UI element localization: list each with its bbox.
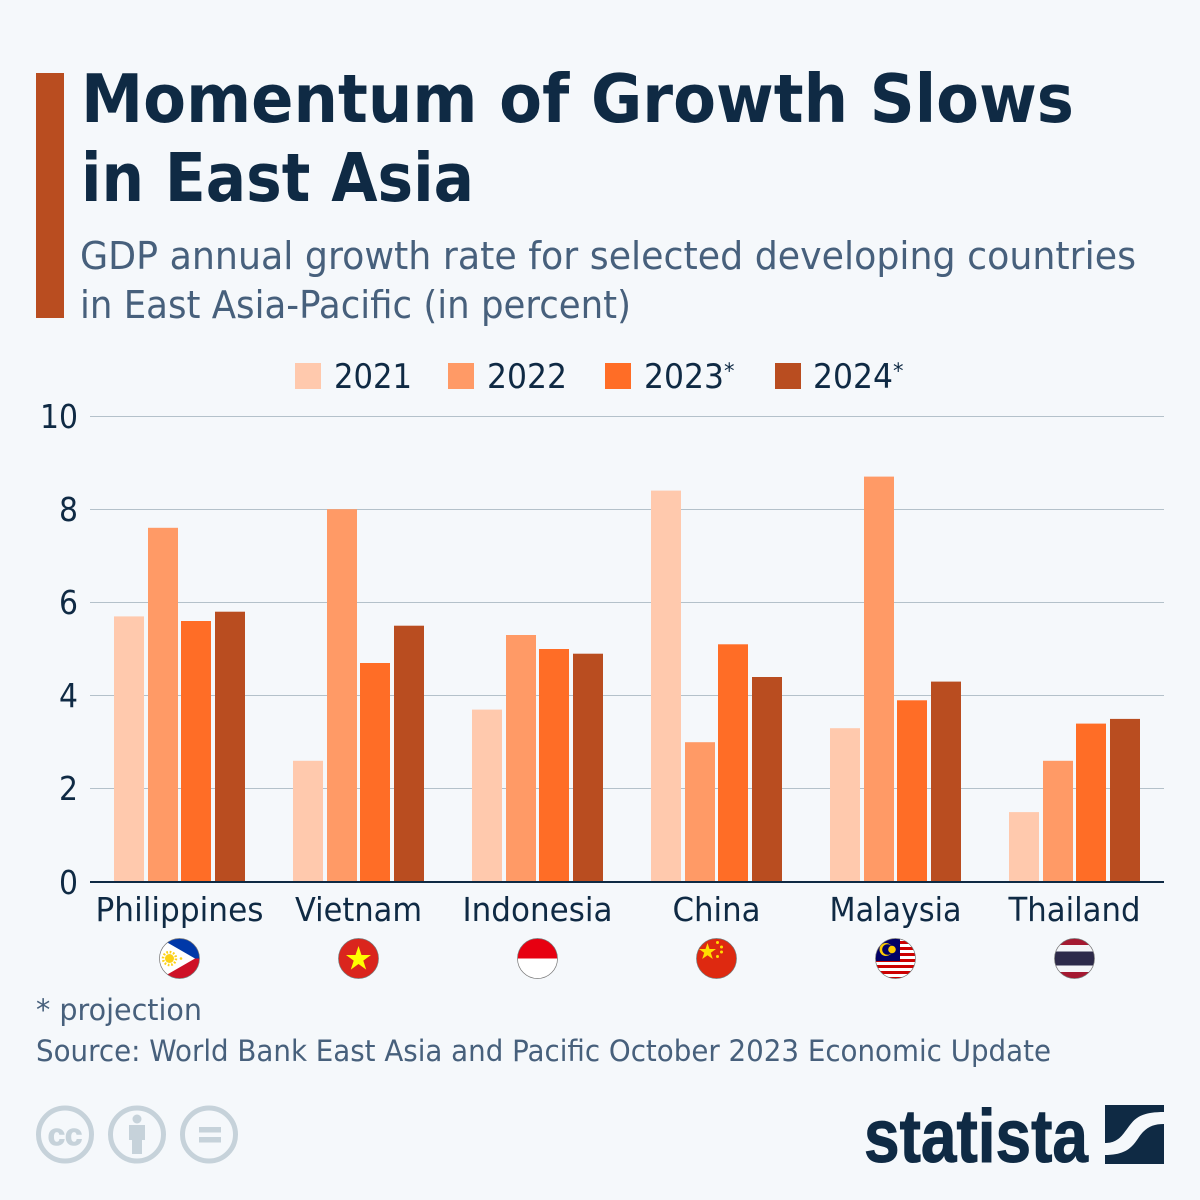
statista logo: statista — [864, 1094, 1089, 1178]
icon: Philippines flag — [159, 938, 200, 979]
y axis labels — [40, 397, 78, 902]
bars: Malaysia — [830, 477, 961, 882]
country labels: China — [672, 890, 760, 929]
country labels: Indonesia — [462, 890, 612, 929]
icon: China flag — [696, 938, 736, 978]
y axis labels: 6 — [59, 583, 78, 622]
footnote: Source: World Bank East Asia and Pacific October 2023 Economic Update — [36, 1034, 1051, 1068]
title: in East Asia — [81, 139, 474, 217]
y axis labels: 8 — [59, 490, 78, 529]
y axis labels: 2 — [59, 769, 78, 808]
country labels: Vietnam — [295, 890, 422, 929]
footnote: * projection — [36, 993, 202, 1027]
icon: no derivatives — [182, 1108, 236, 1161]
gridlines — [90, 416, 1164, 788]
icon: cc license: cc — [48, 1117, 82, 1152]
title — [81, 60, 1074, 217]
bars: China — [651, 491, 782, 882]
legend — [295, 357, 904, 397]
subtitle: in East Asia-Pacific (in percent) — [80, 283, 631, 327]
icon: Vietnam flag — [338, 938, 378, 978]
legend: 2023 — [644, 357, 724, 397]
accent bar — [36, 73, 64, 318]
country labels: Thailand — [1008, 890, 1140, 929]
bars: Indonesia — [472, 635, 603, 882]
bar chart — [114, 477, 1140, 882]
title: Momentum of Growth Slows — [81, 60, 1074, 138]
legend: * — [724, 359, 734, 383]
icon: Malaysia flag — [875, 938, 917, 980]
bars: Thailand — [1009, 719, 1140, 882]
legend: 2022 — [487, 357, 567, 397]
country labels: Malaysia — [830, 890, 962, 929]
bars: Philippines — [114, 528, 245, 882]
icon: attribution — [110, 1108, 164, 1161]
legend: * — [893, 359, 904, 383]
y axis labels: 10 — [40, 397, 78, 436]
subtitle — [80, 234, 1136, 327]
icon: cc license — [38, 1108, 92, 1161]
footnote — [36, 993, 1051, 1068]
country labels: Philippines — [96, 890, 264, 929]
subtitle: GDP annual growth rate for selected developing countries — [80, 234, 1136, 278]
bars: Vietnam — [293, 509, 424, 882]
icon: statista mark — [1105, 1105, 1164, 1164]
x axis line — [90, 881, 1164, 883]
icon: Indonesia flag — [517, 938, 559, 980]
country labels — [96, 890, 1140, 929]
icon: Thailand flag — [1054, 938, 1096, 980]
y axis labels: 0 — [59, 863, 78, 902]
legend: 2024 — [813, 357, 893, 397]
legend: 2021 — [334, 357, 412, 397]
y axis labels: 4 — [59, 676, 78, 715]
